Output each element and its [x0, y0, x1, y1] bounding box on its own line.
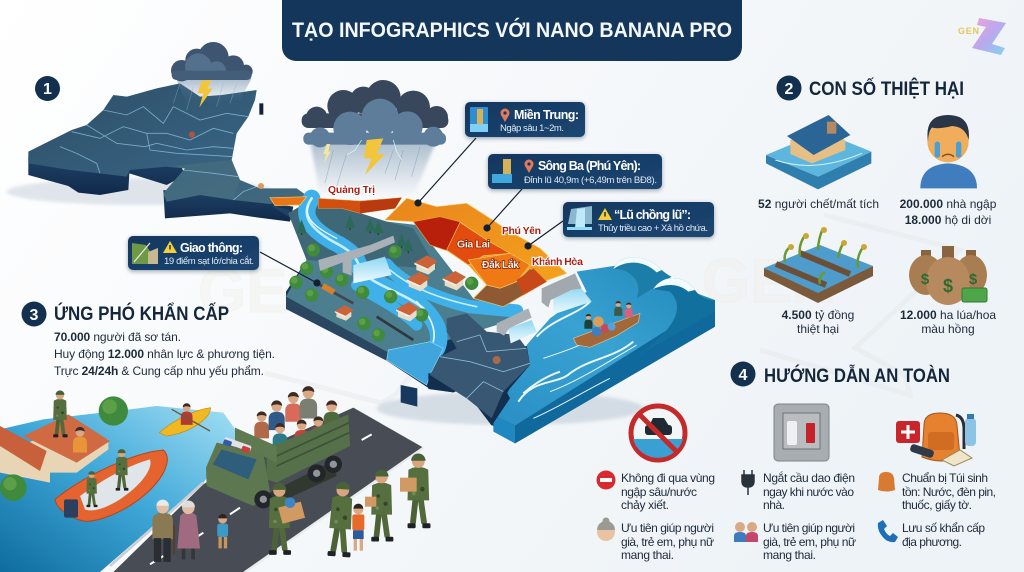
heading: Con số thiệt hại — [776, 76, 964, 100]
item: avoid flooded areas: ngập sâu/nước — [621, 485, 697, 499]
rivers — [307, 198, 517, 348]
illustration: rescue scene — [0, 386, 430, 572]
callout leader lines — [260, 138, 563, 286]
callout: Miền Trung: Miền Trung: — [514, 108, 579, 122]
label: flooded homes — [900, 197, 997, 227]
section 1: number badge — [35, 76, 60, 101]
elderly couple and child — [152, 500, 228, 562]
map labels — [328, 184, 583, 271]
map labels: Đắk Lắk — [482, 258, 519, 271]
label: crop damage — [900, 308, 996, 336]
icon: survival kit — [896, 413, 976, 466]
affected provinces — [270, 197, 567, 307]
icon: location pin — [524, 160, 534, 173]
icon: water gauge — [470, 107, 488, 132]
heading: Con số thiệt hại: 2 — [785, 81, 794, 98]
label: crop damage: 12.000 ha lúa/hoa — [900, 308, 996, 322]
soldiers with supplies — [269, 454, 430, 557]
land block sides — [270, 205, 715, 443]
watermark: Gen Z: GEN — [702, 247, 836, 316]
text block: response facts — [54, 330, 275, 378]
callout: Sông Ba — [488, 154, 662, 189]
icon: flood level gauge — [492, 159, 512, 183]
callout: Giao thông: 19 điểm sạt lở/chia cắt. — [164, 256, 254, 267]
item: prepare survival bag: thuốc, giấy tờ. — [902, 498, 972, 512]
label: deaths: 52 người chết/mất tích — [758, 197, 879, 211]
dams — [318, 236, 592, 343]
callout: Giao thông — [128, 236, 259, 270]
heading: Con số thiệt hại: CON SỐ THIỆT HẠI — [809, 78, 964, 100]
label: economic damage: 4.500 tỷ đồng — [782, 308, 854, 322]
item: cut electricity: nhà. — [763, 498, 785, 512]
label: crop damage: màu hồng — [921, 322, 975, 336]
callout: Lũ chồng lũ: Thủy triều cao + Xả hồ chứa. — [598, 223, 708, 234]
item: cut electricity: Ngắt cầu dao điện — [763, 470, 855, 485]
land top surface — [286, 198, 523, 352]
icon: large storm cloud — [302, 80, 448, 197]
label: flooded homes: 200.000 nhà ngập — [900, 197, 997, 211]
boat with evacuees — [573, 301, 640, 347]
callout: Giao thông: Giao thông: — [180, 241, 243, 255]
logo: Gen Z — [958, 18, 1006, 55]
watermark: Gen Z — [198, 215, 960, 403]
icon: flooded house — [766, 115, 871, 189]
section 2: damage figures — [758, 76, 997, 336]
section 1: number badge: 1 — [43, 81, 52, 98]
flooded houses — [0, 396, 128, 501]
trees and houses — [289, 215, 478, 342]
icon: warning triangle — [598, 208, 612, 220]
callout: Miền Trung — [465, 102, 585, 137]
callout: Sông Ba: Đỉnh lũ 40,9m (+6,49m trên BĐ8). — [524, 175, 657, 186]
item: cut electricity — [742, 470, 855, 512]
label: flooded homes: 18.000 hộ di dời — [905, 213, 991, 227]
item: prioritise vulnerable people: Ưu tiên giúp người — [621, 521, 714, 535]
soldier rescuing child on roof — [53, 390, 87, 452]
item: prepare survival bag — [878, 471, 996, 512]
road — [110, 408, 423, 572]
southern map block — [428, 313, 530, 426]
map labels: Quảng Trị — [328, 184, 375, 196]
item: save emergency numbers — [878, 520, 985, 549]
army truck with evacuees — [206, 386, 350, 508]
title banner — [282, 0, 742, 61]
icon: warning sign — [163, 241, 177, 253]
callout: Sông Ba: Sông Ba (Phú Yên): — [538, 159, 641, 173]
text block: response facts: 70.000 người đã sơ tán. — [54, 330, 181, 344]
icon: map pin — [500, 108, 510, 122]
sea — [493, 257, 715, 443]
icon: dam spillway — [567, 206, 592, 230]
callout: Miền Trung: Ngập sâu 1~2m. — [500, 123, 564, 134]
section 4: safety guidance — [596, 362, 996, 562]
icon: money bags: $ — [921, 271, 930, 288]
item: save emergency numbers: Lưu số khẩn cấp — [902, 521, 985, 535]
callout: Lũ chồng lũ: “Lũ chồng lũ”: — [614, 208, 691, 222]
icon: landslide road — [132, 243, 158, 264]
heading: Hướng dẫn an toàn: 4 — [739, 367, 748, 384]
icon: money bags: $ — [943, 276, 953, 296]
label: economic damage: thiệt hại — [797, 322, 839, 336]
title banner: TẠO INFOGRAPHICS VỚI NANO BANANA PRO — [292, 18, 732, 42]
item: help family members: Ưu tiên giúp người — [763, 521, 855, 535]
logo: Gen Z: GEN — [958, 26, 979, 36]
item: prepare survival bag: Chuẩn bị Túi sinh — [902, 471, 988, 485]
heading: Ứng phó khẩn cấp: 3 — [30, 307, 39, 324]
icon: money bags — [909, 246, 987, 305]
map labels: Phú Yên — [502, 225, 541, 237]
heading: Hướng dẫn an toàn: HƯỚNG DẪN AN TOÀN — [764, 365, 950, 387]
heading: Ứng phó khẩn cấp: ỨNG PHÓ KHẨN CẤP — [54, 303, 229, 325]
item: prioritise vulnerable people: mang thai. — [621, 548, 674, 562]
icon: flooded field — [764, 227, 873, 303]
map labels: Khánh Hòa — [532, 256, 583, 268]
item: avoid flooded areas: chảy xiết. — [621, 498, 669, 512]
item: avoid flooded areas: Không đi qua vùng — [621, 471, 715, 485]
section 3: emergency response — [0, 302, 430, 572]
item: save emergency numbers: địa phương. — [902, 535, 962, 549]
text block: response facts: Huy động 12.000 nhân lực & phương tiện. — [54, 347, 275, 361]
icon: no driving through flood — [631, 406, 685, 460]
icon: money bags: $ — [969, 271, 978, 288]
item: avoid flooded areas — [596, 470, 715, 512]
rescue raft — [55, 449, 167, 521]
kayak — [159, 403, 211, 436]
item: cut electricity: ngay khi nước vào — [763, 485, 854, 499]
icon: crying person — [920, 115, 977, 188]
icon: circuit breaker — [774, 404, 829, 461]
callout: Lũ chồng lũ — [563, 202, 714, 237]
label: economic damage — [782, 308, 854, 336]
panel: northern map with storm — [7, 42, 448, 222]
item: help family members — [734, 521, 856, 562]
icon: small storm cloud — [171, 42, 253, 110]
item: prioritise vulnerable people — [597, 518, 714, 562]
item: help family members: mang thai. — [763, 548, 816, 562]
item: prioritise vulnerable people: già, trẻ em, phụ nữ — [621, 535, 714, 549]
item: help family members: già, trẻ em, phụ nữ — [763, 535, 856, 549]
watermark: Gen Z: GEN — [198, 257, 332, 326]
text block: response facts: Trực 24/24h & Cung cấp nhu yếu phẩm. — [54, 364, 264, 378]
panel: central flood map — [270, 197, 715, 443]
heading: Ứng phó khẩn cấp — [22, 302, 229, 326]
flood water — [0, 406, 240, 572]
item: prepare survival bag: tồn: Nước, đèn pin, — [902, 485, 996, 499]
map labels: Gia Lai — [457, 238, 490, 250]
heading: Hướng dẫn an toàn — [730, 362, 950, 387]
